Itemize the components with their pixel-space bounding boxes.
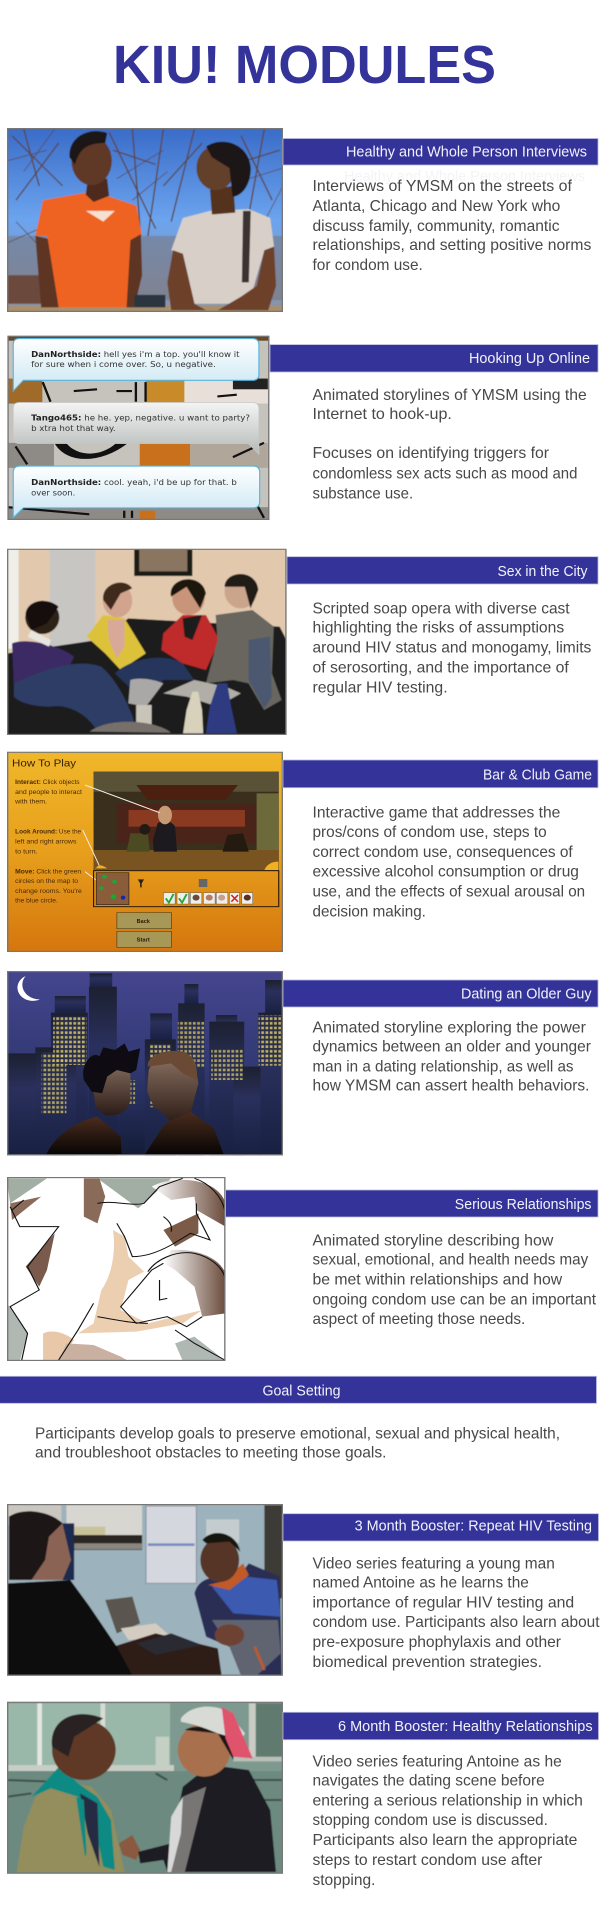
text block: sexual, emotional, and health needs may (312, 1252, 588, 1269)
chat bubble 3: DanNorthside: cool. yeah, i'd be up for that. b (31, 478, 237, 488)
text block: excessive alcohol consumption or drug (312, 863, 579, 880)
text block: and troubleshoot obstacles to meeting those goals. (35, 1445, 386, 1462)
banner heading (226, 1190, 598, 1217)
text block: stopping. (312, 1872, 375, 1889)
image: game how-to-play screen: Move: Click the green (15, 869, 81, 876)
text block (312, 1753, 583, 1889)
text block: pros/cons of condom use, steps to (312, 824, 547, 841)
title: KIU! MODULES (113, 35, 496, 95)
image: game how-to-play screen: Back (137, 918, 150, 925)
text block: steps to restart condom use after (312, 1852, 543, 1869)
text block: Focuses on identifying triggers for (312, 445, 550, 462)
chat bubble 2: Tango465: he he. yep, negative. u want to party? (31, 414, 250, 424)
image: online chat bubbles over comic art (7, 336, 269, 520)
text block: stopping condom use is discussed. (312, 1812, 548, 1829)
text block (312, 178, 591, 274)
text block: Interactive game that addresses the (312, 805, 560, 822)
text block: named Antoine as he learns the (312, 1575, 529, 1592)
text block: regular HIV testing. (312, 679, 448, 696)
banner heading (0, 1376, 596, 1403)
illustration: two men facing each other in a night city (7, 971, 283, 1155)
text block: use, and the effects of sexual arousal on (312, 883, 585, 900)
text block: Participants develop goals to preserve emotional, sexual and physical health, (35, 1425, 560, 1442)
photo: two men talking on a street (7, 1702, 283, 1874)
text block: for condom use. (312, 257, 423, 274)
text block: Interviews of YMSM on the streets of (312, 178, 572, 195)
banner heading (283, 138, 598, 165)
image: game how-to-play screen: change rooms. You're (15, 888, 82, 895)
faint ghost heading: Healthy and Whole Person Interviews (344, 169, 585, 185)
panel: 3 Month Booster (7, 1504, 600, 1676)
banner heading: 3 Month Booster: Repeat HIV Testing (355, 1519, 592, 1535)
banner heading (270, 345, 598, 372)
text block: Animated storylines of YMSM using the (312, 387, 587, 404)
chat bubble 1 (13, 339, 259, 391)
text block: Video series featuring a young man (312, 1555, 555, 1572)
panel: Sex in the City (7, 549, 598, 735)
chat bubble 1: for sure when i come over. So, u negative. (31, 360, 216, 370)
text block: condom use. Participants also learn about (312, 1614, 600, 1631)
banner heading: Serious Relationships (455, 1197, 592, 1213)
image: game how-to-play screen: How To Play (12, 758, 77, 769)
text block: of serosorting, and the importance of (312, 659, 569, 676)
text block (312, 600, 591, 696)
text block: navigates the dating scene before (312, 1773, 545, 1790)
banner heading: Bar & Club Game (483, 767, 592, 783)
banner heading: Healthy and Whole Person Interviews (346, 144, 587, 160)
banner heading: Hooking Up Online (469, 351, 590, 367)
text block: pre-exposure phophylaxis and other (312, 1634, 562, 1651)
text block: entering a serious relationship in which (312, 1793, 583, 1810)
text block: Participants also learn the appropriate (312, 1832, 577, 1849)
banner heading: Dating an Older Guy (461, 987, 592, 1003)
panel: Hooking Up Online (7, 336, 598, 520)
text block: Video series featuring Antoine as he (312, 1753, 562, 1770)
text block: Atlanta, Chicago and New York who (312, 198, 560, 215)
chat bubble 2 (13, 402, 259, 454)
text block: discuss family, community, romantic (312, 218, 560, 235)
banner heading: Goal Setting (262, 1384, 340, 1400)
text block: Animated storyline describing how (312, 1232, 554, 1249)
text block: ongoing condom use can be an important (312, 1291, 597, 1308)
text block: dynamics between an older and younger (312, 1039, 592, 1056)
photo: two men in an office (7, 1504, 283, 1676)
text block: substance use. (312, 486, 413, 502)
text block (312, 1555, 600, 1671)
panel: Healthy and Whole Person Interviews (7, 128, 598, 312)
image: game how-to-play screen: Interact: Click objects (15, 779, 80, 786)
text block: relationships, and setting positive norms (312, 237, 591, 254)
text block: highlighting the risks of assumptions (312, 620, 564, 637)
chat bubble 3: over soon. (31, 489, 75, 498)
image: game how-to-play screen: and people to interact (15, 789, 82, 796)
panel: Bar & Club Game (7, 752, 598, 952)
text block: aspect of meeting those needs. (312, 1311, 525, 1328)
image: game how-to-play screen: Look Around: Use the (15, 829, 81, 836)
text block: biomedical prevention strategies. (312, 1654, 542, 1671)
image: game how-to-play screen: the blue circle. (15, 898, 58, 905)
panel: Dating an Older Guy (7, 971, 598, 1155)
text block: man in a dating relationship, as well as (312, 1059, 574, 1076)
text block (312, 805, 585, 920)
text block (35, 1425, 560, 1462)
banner heading (283, 980, 598, 1007)
text block: Animated storyline exploring the power (312, 1019, 587, 1036)
image: game how-to-play screen: circles on the map to (15, 878, 78, 885)
chat bubble 1: DanNorthside: hell yes i'm a top. you'll know it (31, 350, 240, 360)
text block (312, 1232, 597, 1328)
banner heading: Sex in the City (498, 564, 588, 580)
panel: Goal Setting (0, 1376, 596, 1462)
text block: condomless sex acts such as mood and (312, 466, 577, 482)
panel: Serious Relationships (7, 1177, 598, 1361)
banner heading (283, 1712, 598, 1740)
text block: how YMSM can assert health behaviors. (312, 1078, 589, 1095)
text block: importance of regular HIV testing and (312, 1595, 574, 1612)
photo: four men on a couch (7, 549, 287, 735)
panel: 6 Month Booster (7, 1702, 598, 1889)
text block: Internet to hook-up. (312, 406, 452, 423)
banner heading: 6 Month Booster: Healthy Relationships (338, 1719, 593, 1735)
text block: correct condom use, consequences of (312, 844, 573, 861)
image: game how-to-play screen: Start (137, 937, 150, 943)
text block: be met within relationships and how (312, 1272, 563, 1289)
image: game how-to-play screen: left and right arrows (15, 839, 77, 845)
image: game how-to-play screen: to turn. (15, 849, 38, 855)
text block: decision making. (312, 903, 426, 920)
chat bubble 3 (13, 466, 260, 518)
chat bubble 2: b xtra hot that way. (31, 424, 116, 434)
image: game how-to-play screen: with them. (14, 799, 47, 806)
banner heading (283, 760, 598, 788)
text block (312, 387, 587, 502)
banner heading (283, 1514, 598, 1541)
text block (312, 1019, 592, 1095)
photo: two young men outdoors (7, 128, 283, 312)
banner heading (287, 557, 598, 584)
text block: Scripted soap opera with diverse cast (312, 600, 570, 617)
text block: around HIV status and monogamy, limits (312, 640, 591, 657)
illustration: couple lying together (7, 1177, 226, 1361)
image: game how-to-play screen (7, 752, 283, 952)
